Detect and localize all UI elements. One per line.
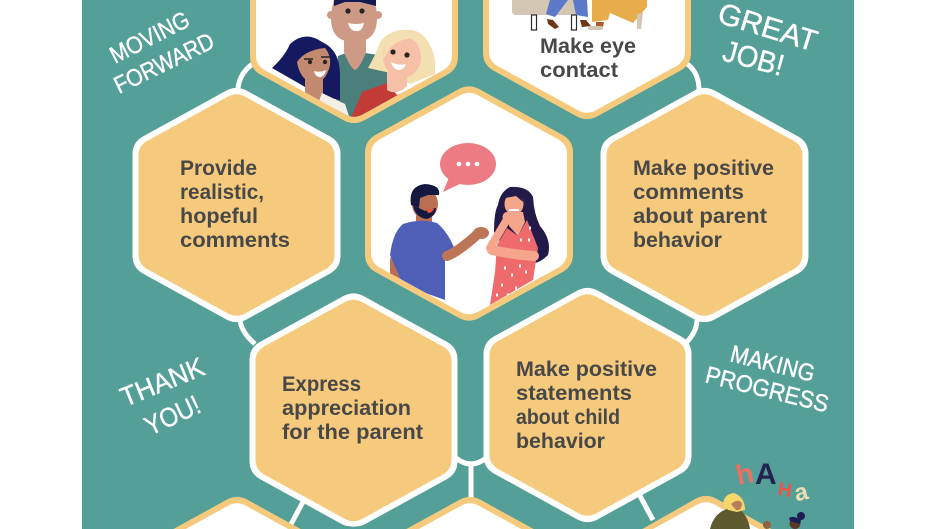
hexagon: express appreciation [250,293,458,527]
haha lettering: A [755,458,777,491]
text: make positive comments about parent behavior [633,157,774,252]
handwritten: moving forward: FORWARD [110,28,219,99]
handwritten: making progress [703,341,831,418]
hexagon: bottom right [642,496,771,529]
hexagon: make eye contact [483,0,691,119]
haha lettering: H [777,479,793,502]
handwritten: great job: JOB! [719,35,788,83]
hexagon: positive statements about child [484,288,692,522]
text: express appreciation for the parent: for the parent [282,421,423,444]
handwritten: thank you: YOU! [140,390,205,441]
text: make positive comments about parent behavior: behavior [633,229,722,252]
text: express appreciation for the parent [282,373,423,444]
hexagon: family illustration [250,0,458,123]
text: make positive statements about child behavior: Make positive [516,358,657,381]
handwritten: moving forward: MOVING [105,6,194,69]
text: express appreciation for the parent: appreciation [282,397,411,420]
text: provide realistic, hopeful comments [180,157,290,252]
hexagon: provide realistic comments [132,88,340,322]
handwritten: great job [714,0,821,83]
text: make eye contact: Make eye [540,35,636,58]
text: make positive comments about parent behavior: Make positive [633,157,774,180]
hexagon: positive comments about parent [600,88,808,322]
text: make positive statements about child behavior: statements [516,382,632,405]
text: make eye contact [540,35,636,82]
handwritten: making progress: MAKING [728,341,818,388]
text: provide realistic, hopeful comments: realistic, [180,181,264,204]
hexagon: bottom center [406,497,534,529]
text: make positive statements about child behavior: behavior [516,430,605,453]
haha lettering: a [792,478,811,507]
hexagon: bottom left [173,497,301,529]
text: provide realistic, hopeful comments: hopeful [180,205,258,228]
text: provide realistic, hopeful comments: Provide [180,157,257,180]
text: make positive comments about parent behavior: about parent [633,205,767,228]
handwritten: thank you: THANK [116,352,209,413]
text: express appreciation for the parent: Express [282,373,361,396]
text: make positive comments about parent behavior: comments [633,181,744,204]
text: make eye contact: contact [540,59,618,82]
illustration: family of three [272,0,435,125]
text: make positive statements about child behavior [516,358,657,453]
white connector lines [238,63,699,526]
handwritten: thank you [116,352,209,441]
haha lettering: h [733,457,756,491]
hexagon: conversation illustration [365,86,573,321]
illustration: laughing people [710,493,805,529]
haha lettering [733,457,811,507]
text: provide realistic, hopeful comments: comments [180,229,290,252]
text: make positive statements about child behavior: about child [516,406,620,429]
illustration: man and woman talking [390,143,549,305]
illustration: two people seated on a sofa [512,0,647,30]
handwritten: making progress: PROGRESS [703,362,831,418]
